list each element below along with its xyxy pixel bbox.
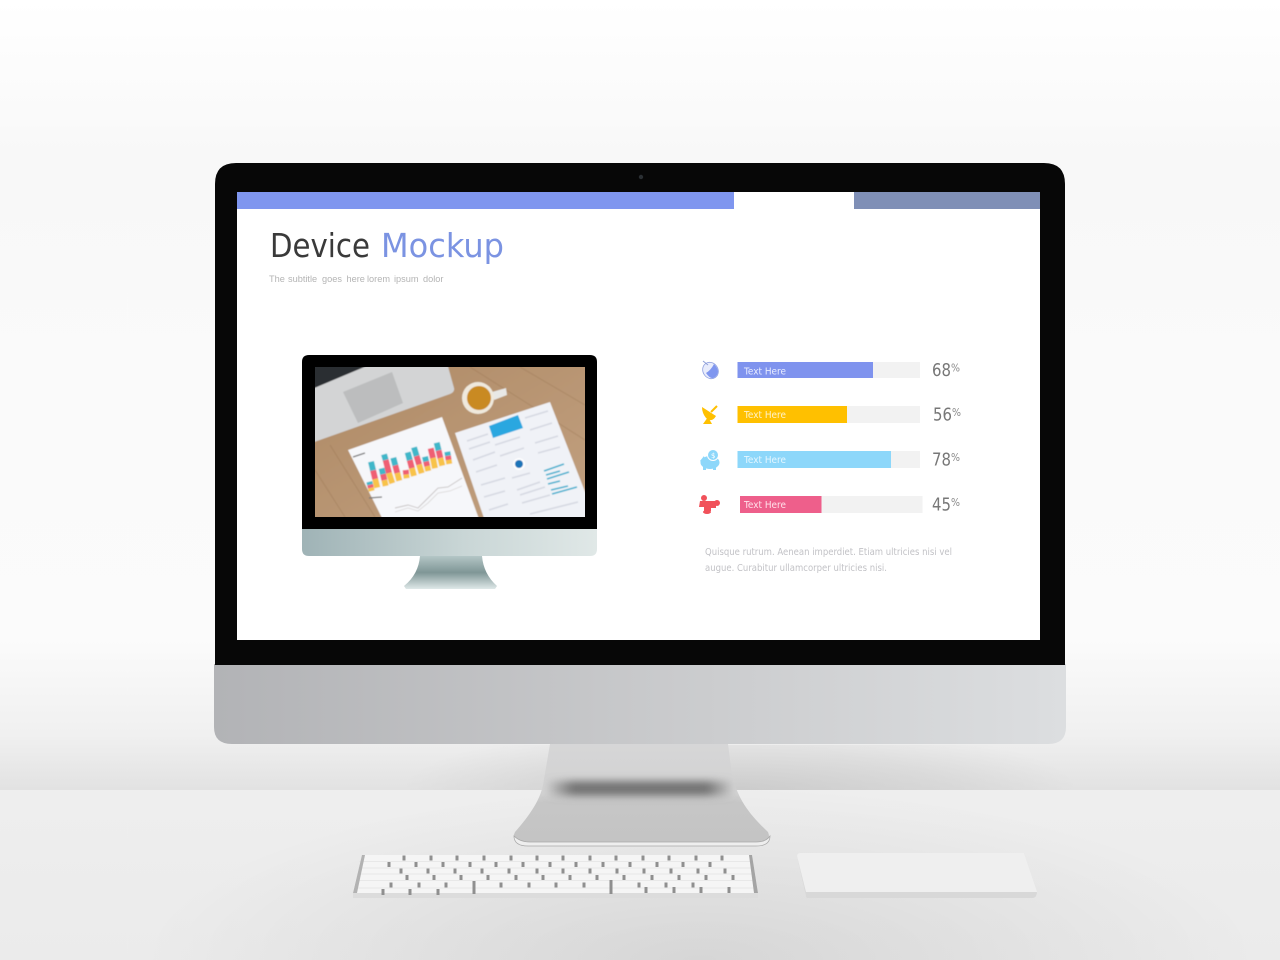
small monitor illustration bbox=[300, 352, 600, 589]
percent: % bbox=[951, 362, 960, 374]
subtitle: dolor bbox=[423, 274, 443, 284]
progress row: mouse bbox=[699, 359, 960, 382]
value: 68 bbox=[932, 361, 951, 381]
keyboard bbox=[353, 855, 758, 898]
title: Mockup bbox=[381, 226, 504, 265]
progress row: puzzle piece bbox=[699, 495, 960, 516]
bar track bbox=[738, 451, 920, 468]
desk surface bbox=[0, 790, 1280, 960]
description text: Quisque rutrum. Aenean imperdiet. Etiam ultricies nisi vel bbox=[705, 547, 952, 558]
bar fill bbox=[738, 451, 891, 468]
small monitor stand bbox=[404, 556, 497, 589]
title: Device bbox=[270, 226, 370, 265]
coffee cup bbox=[492, 388, 507, 400]
webcam bbox=[639, 175, 643, 179]
small monitor chin bbox=[302, 528, 597, 556]
bar label: Text Here bbox=[743, 500, 786, 511]
bar label: Text Here bbox=[743, 455, 786, 466]
bar track bbox=[738, 406, 920, 423]
subtitle: lorem bbox=[367, 274, 390, 284]
value: 56 bbox=[933, 406, 952, 426]
value: 45 bbox=[932, 496, 951, 516]
icon: piggy bank bbox=[700, 450, 720, 470]
icon: mouse bbox=[699, 359, 722, 382]
report with text bbox=[454, 402, 585, 517]
bar fill bbox=[738, 362, 873, 378]
progress row: piggy bank bbox=[700, 450, 960, 470]
bar track bbox=[740, 496, 922, 513]
bar fill bbox=[740, 496, 822, 513]
bar fill bbox=[738, 406, 847, 423]
progress row: satellite dish bbox=[702, 406, 961, 426]
desk shading bbox=[140, 790, 1260, 960]
bar track bbox=[738, 362, 920, 378]
monitor body bbox=[214, 163, 1066, 744]
subtitle: The bbox=[269, 274, 285, 284]
slide top banner right bbox=[854, 192, 1040, 209]
small monitor bezel bbox=[302, 355, 597, 529]
icon: piggy bank: $ bbox=[711, 452, 715, 460]
icon: puzzle piece bbox=[699, 495, 720, 514]
percent: % bbox=[951, 452, 960, 464]
subtitle: here bbox=[346, 274, 365, 284]
trackpad bbox=[797, 853, 1037, 898]
subtitle: subtitle bbox=[288, 274, 317, 284]
subtitle: ipsum bbox=[394, 274, 419, 284]
monitor stand bbox=[514, 744, 770, 846]
percent: % bbox=[952, 407, 961, 419]
screen bbox=[237, 192, 1040, 640]
monitor chin bbox=[214, 664, 1066, 744]
bar label: Text Here bbox=[743, 410, 786, 421]
bar label: Text Here bbox=[743, 366, 786, 378]
percent: % bbox=[951, 497, 960, 509]
subtitle: goes bbox=[322, 274, 342, 284]
wall shadow below monitor bbox=[400, 745, 1080, 790]
value: 78 bbox=[932, 450, 951, 470]
stacked bars bbox=[369, 443, 449, 491]
description text: augue. Curabitur ullamcorper ultricies nisi. bbox=[705, 563, 887, 574]
monitor bezel bbox=[215, 163, 1065, 665]
photo: desk with reports bbox=[315, 367, 585, 517]
description text bbox=[705, 547, 952, 574]
slide top banner left bbox=[237, 192, 734, 209]
icon: satellite dish bbox=[702, 406, 717, 424]
laptop bbox=[315, 367, 455, 442]
report with bar chart bbox=[348, 416, 479, 517]
